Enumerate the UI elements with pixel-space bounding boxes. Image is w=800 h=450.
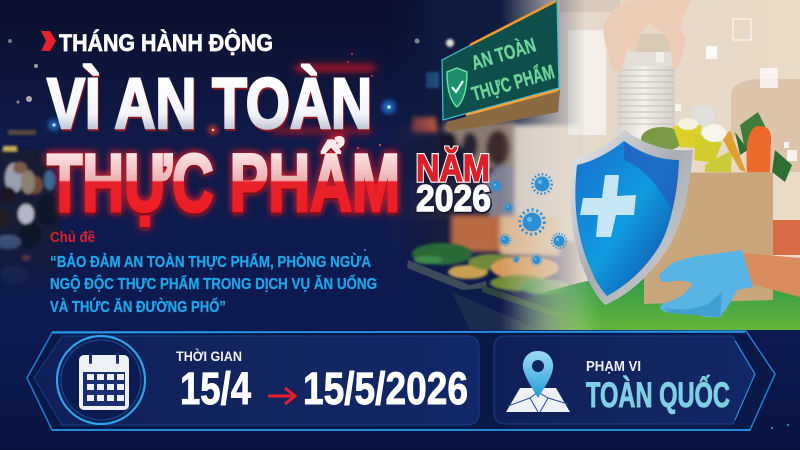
food: arm and blue glove — [659, 250, 800, 317]
panel: scope — [494, 336, 755, 424]
title: Thực Phẩm — [47, 138, 400, 231]
can — [617, 52, 675, 142]
icon: map pin — [506, 351, 570, 412]
photo: street food stall — [388, 0, 579, 258]
year badge: Năm 2026 — [416, 146, 492, 220]
sign text — [469, 33, 557, 106]
sign: An toàn thực phẩm — [442, 0, 560, 132]
kicker: Tháng hành động: THÁNG HÀNH ĐỘNG — [59, 29, 273, 57]
photo: grocery box flap — [731, 79, 800, 172]
theme label: Chủ đề — [50, 230, 95, 246]
arrow: date range — [268, 388, 295, 404]
info banner — [27, 331, 775, 430]
start date: 15/4 — [180, 363, 251, 414]
virus icons — [490, 174, 566, 265]
scope value: TOÀN QUỐC — [586, 375, 730, 415]
year badge: Năm 2026: NĂM — [416, 146, 490, 190]
title: red glow: THỰC PHẨM — [47, 136, 400, 229]
background: night crowd left — [0, 130, 60, 300]
label: time: THỜI GIAN — [176, 347, 242, 364]
end date: 15/5/2026 — [303, 363, 468, 414]
year badge: Năm 2026: NĂM — [416, 146, 490, 190]
title: Vì An Toàn: VÌ AN TOÀN — [47, 65, 372, 144]
food: kraft box — [644, 172, 800, 304]
photo: bright kitchen scene — [480, 0, 800, 330]
panel: time — [34, 336, 479, 425]
title: Vì An Toàn: VÌ AN TOÀN — [48, 67, 373, 146]
sign text: THỰC PHẨM — [469, 60, 557, 106]
icon: medical cross — [580, 175, 636, 237]
label: scope: PHẠM VI — [586, 359, 641, 375]
photo: food trays — [407, 243, 569, 330]
photo: hand holding can — [603, 0, 692, 142]
shield with cross — [571, 130, 693, 305]
decorative digital squares — [656, 19, 797, 161]
icon: sign shield check — [447, 68, 467, 107]
heading arrow icon — [41, 31, 56, 51]
theme quote: “BẢO ĐẢM AN TOÀN THỰC PHẨM, PHÒNG NGỪA — [50, 252, 371, 271]
icon: calendar in ring — [57, 336, 145, 424]
year badge: Năm 2026: 2026 — [416, 178, 491, 219]
title: Thực Phẩm: THỰC PHẨM — [47, 138, 400, 229]
title: Thực Phẩm: THỰC PHẨM — [47, 140, 400, 231]
photo: green floor fade — [500, 278, 800, 330]
title: red glow — [47, 65, 400, 229]
theme quote: VÀ THỨC ĂN ĐƯỜNG PHỐ” — [50, 296, 226, 316]
theme quote: NGỘ ĐỘC THỰC PHẨM TRONG DỊCH VỤ ĂN UỐNG — [50, 273, 377, 293]
food: vegetables and eggs — [641, 106, 792, 182]
sign text: AN TOÀN — [469, 33, 539, 75]
year badge: Năm 2026: 2026 — [417, 179, 492, 220]
theme quote — [50, 252, 377, 316]
